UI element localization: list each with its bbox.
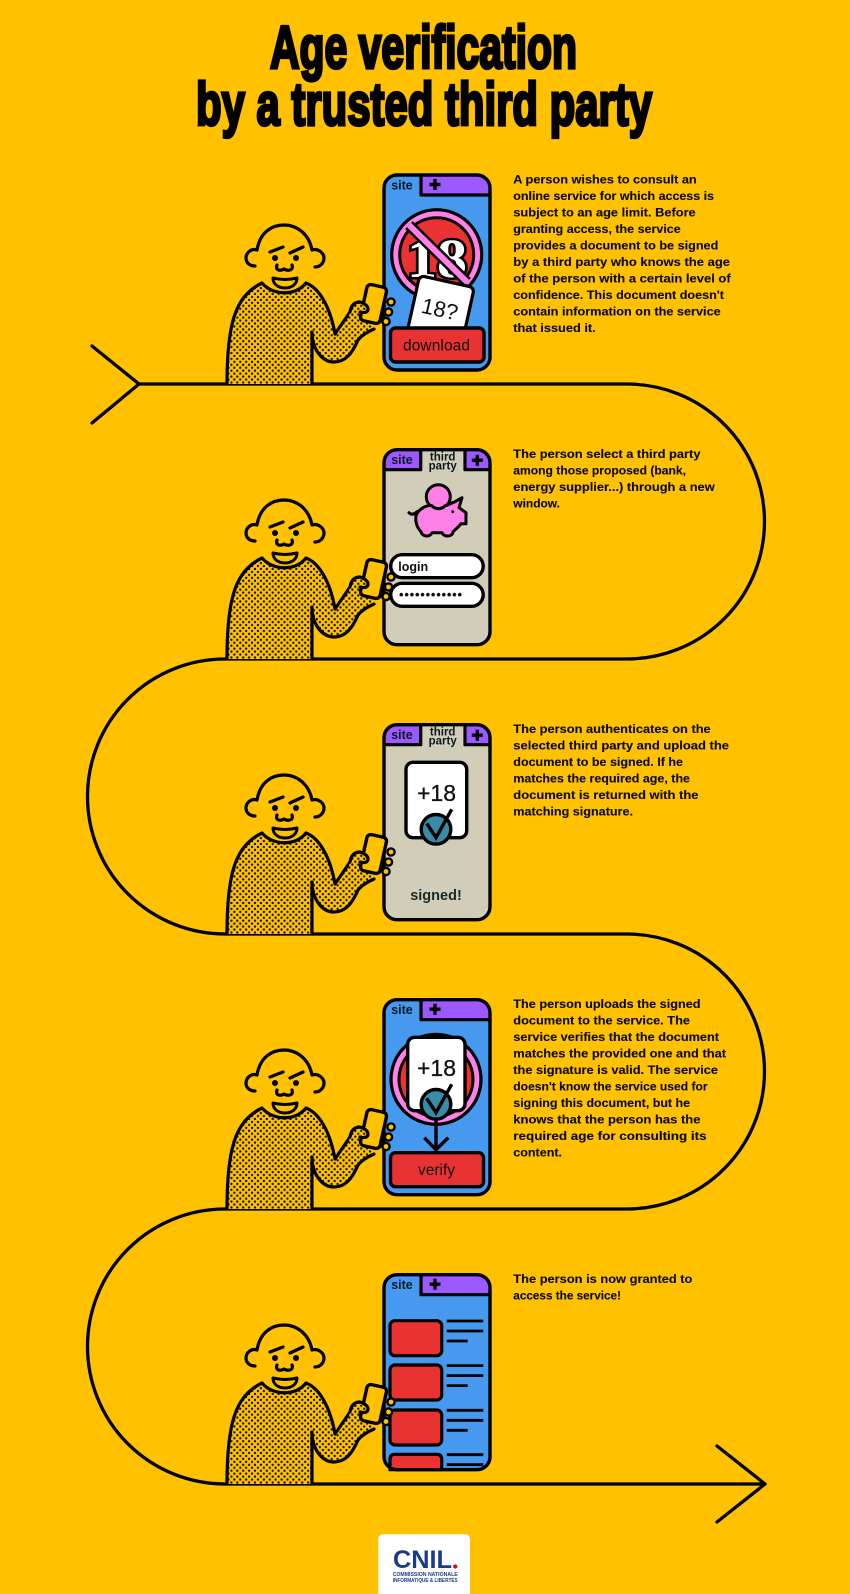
step 1 phone: download bbox=[403, 338, 470, 354]
step 1 phone bbox=[384, 175, 490, 370]
step 1 description: online service for which access is bbox=[513, 189, 714, 203]
step 1 phone: 18 bbox=[407, 228, 467, 289]
step 1 description: subject to an age limit. Before bbox=[513, 205, 696, 219]
step 4 description bbox=[513, 997, 726, 1160]
step 3 description bbox=[513, 722, 729, 818]
step 3 description: matching signature. bbox=[513, 804, 633, 818]
step 3 phone: signed! bbox=[410, 888, 462, 904]
step 3 description: matches the required age, the bbox=[513, 772, 690, 786]
step 4 person bbox=[227, 1050, 395, 1209]
serpentine path with start tail and end arrow bbox=[88, 346, 765, 1522]
step 3 phone: +18 bbox=[417, 780, 456, 806]
step 3 description: document is returned with the bbox=[513, 788, 699, 802]
step 4 phone bbox=[384, 1000, 490, 1195]
CNIL logo: COMMISSION NATIONALE bbox=[393, 1572, 458, 1578]
step 2 phone: login bbox=[398, 560, 428, 574]
step 3 bbox=[227, 722, 729, 934]
step 4 description: matches the provided one and that bbox=[513, 1046, 726, 1060]
step 4 description: document to the service. The bbox=[513, 1014, 690, 1028]
step 1 description: contain information on the service bbox=[513, 304, 721, 318]
step 4 bbox=[227, 997, 726, 1209]
step 1 description: by a third party who knows the age bbox=[513, 255, 730, 269]
step 3 description: The person authenticates on the bbox=[513, 722, 711, 736]
step 5 description: The person is now granted to bbox=[513, 1272, 693, 1286]
step 1 person bbox=[227, 225, 395, 384]
CNIL logo bbox=[378, 1534, 470, 1594]
step 2 phone: •••••••••••• bbox=[399, 587, 462, 602]
step 3 person bbox=[227, 775, 395, 934]
step 1 phone: 18? bbox=[419, 293, 460, 325]
CNIL logo: CNIL bbox=[393, 1546, 452, 1574]
step 1 description bbox=[513, 172, 732, 335]
step 2 description: among those proposed (bank, bbox=[513, 464, 686, 478]
step 4 description: The person uploads the signed bbox=[513, 997, 700, 1011]
step 4 phone: +18 bbox=[417, 1055, 456, 1081]
icon: piggy bank bbox=[409, 485, 466, 536]
step 3 phone bbox=[384, 725, 490, 920]
step 5 phone bbox=[384, 1275, 490, 1470]
CNIL logo: INFORMATIQUE & LIBERTÉS bbox=[393, 1576, 458, 1584]
step 4 description: service verifies that the document bbox=[513, 1030, 719, 1044]
step 4 description: knows that the person has the bbox=[513, 1112, 701, 1126]
step 5 description bbox=[513, 1272, 693, 1302]
step 4 description: doesn't know the service used for bbox=[513, 1080, 708, 1094]
step 1 description: provides a document to be signed bbox=[513, 238, 718, 252]
step 2 description bbox=[512, 447, 715, 510]
step 4 phone: verify bbox=[418, 1162, 455, 1179]
step 5 description: access the service! bbox=[513, 1288, 621, 1302]
step 4 description: required age for consulting its bbox=[513, 1129, 707, 1143]
step 3 description: document to be signed. If he bbox=[513, 755, 683, 769]
step 2 person bbox=[227, 500, 395, 659]
step 5 bbox=[227, 1272, 693, 1484]
step 1 description: A person wishes to consult an bbox=[513, 172, 697, 186]
step 2 phone bbox=[384, 450, 490, 645]
step 2 bbox=[227, 447, 715, 659]
step 2 description: window. bbox=[512, 496, 560, 510]
title: Age verification bbox=[270, 14, 577, 81]
step 4 description: the signature is valid. The service bbox=[513, 1063, 718, 1077]
step 2 description: energy supplier...) through a new bbox=[513, 480, 715, 494]
step 1 description: that issued it. bbox=[513, 321, 596, 335]
step 1 description: granting access, the service bbox=[513, 222, 681, 236]
step 5 person bbox=[227, 1325, 395, 1484]
step 1 bbox=[227, 172, 732, 384]
title: by a trusted third party bbox=[196, 71, 652, 138]
step 3 description: selected third party and upload the bbox=[513, 738, 729, 752]
step 4 description: signing this document, but he bbox=[513, 1096, 690, 1110]
step 1 description: confidence. This document doesn't bbox=[513, 288, 724, 302]
step 2 description: The person select a third party bbox=[513, 447, 701, 461]
step 1 description: of the person with a certain level of bbox=[513, 271, 732, 285]
title bbox=[196, 14, 652, 138]
step 4 description: content. bbox=[513, 1146, 562, 1160]
